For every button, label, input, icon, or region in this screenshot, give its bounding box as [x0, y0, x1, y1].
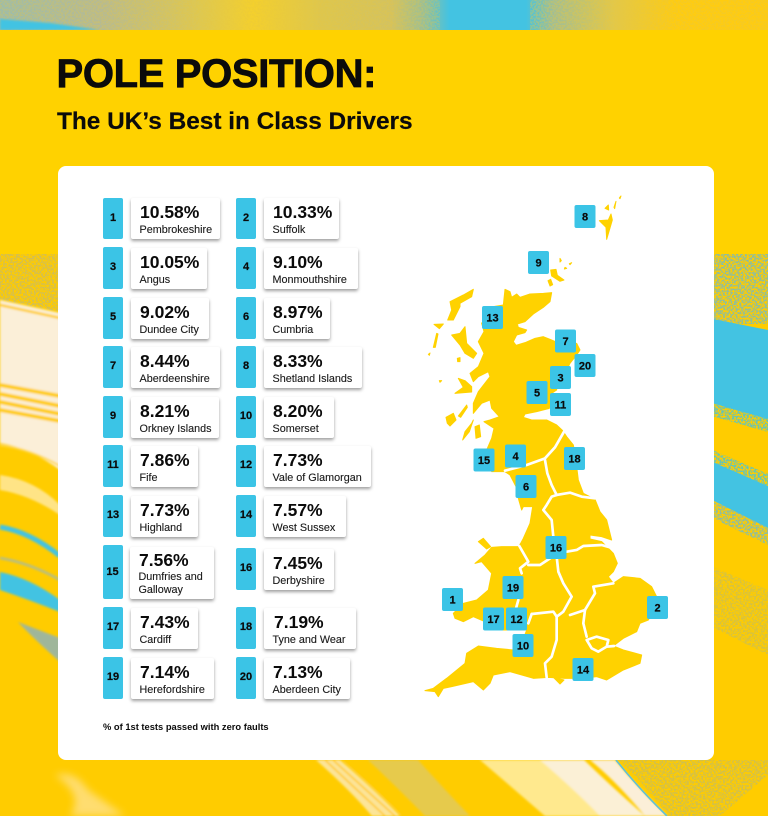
panel: white card: [58, 166, 714, 760]
rank 19: Herefordshire: 7.14%: [140, 662, 190, 682]
rank 7: Aberdeenshire: [103, 346, 222, 392]
rank 8: Shetland Islands: [236, 346, 364, 392]
left texture: [0, 254, 60, 312]
marker 6: [516, 475, 536, 498]
rank 20: Aberdeen City: 7.13%: [273, 662, 323, 682]
marker 2: 2: [654, 602, 661, 614]
rank 16: Derbyshire: 16: [240, 562, 252, 574]
marker 18: [564, 447, 585, 470]
rank 10: Somerset: 8.20%: [273, 400, 323, 420]
rank 14: West Sussex: [236, 495, 348, 541]
rank 13: Highland: 7.73%: [140, 500, 190, 520]
rank 1: Pembrokeshire: 10.58%: [140, 202, 199, 222]
marker 9: 9: [535, 258, 542, 270]
rank 6: Cumbria: [236, 297, 332, 343]
rank 17: Cardiff: 17: [107, 621, 119, 633]
rank 18: Tyne and Wear: 7.19%: [274, 612, 324, 632]
rank 18: Tyne and Wear: 18: [240, 621, 252, 633]
rank 4: Monmouthshire: Monmouthshire: [272, 274, 347, 286]
marker 14: 14: [577, 664, 590, 676]
marker 5: [526, 381, 548, 404]
marker 1: 1: [449, 594, 456, 606]
rank 8: Shetland Islands: 8: [243, 360, 249, 372]
marker 11: [550, 393, 571, 416]
marker 15: 15: [478, 455, 490, 467]
Shetland: [599, 196, 621, 239]
marker 3: [550, 366, 571, 389]
marker 1: [442, 588, 463, 611]
rank 9: Orkney Islands: Orkney Islands: [140, 422, 212, 434]
rank 20: Aberdeen City: [236, 657, 352, 703]
rank 3: Angus: [103, 247, 209, 293]
marker 14: [572, 658, 594, 681]
marker 7: [555, 330, 576, 352]
rank 14: West Sussex: West Sussex: [272, 522, 335, 534]
rank 11: Fife: Fife: [140, 472, 158, 484]
rank 11: Fife: [103, 445, 200, 491]
Orkney: [548, 258, 572, 286]
rank 2: Suffolk: 10.33%: [273, 202, 332, 222]
rank 10: Somerset: Somerset: [272, 422, 319, 434]
rank 1: Pembrokeshire: 1: [110, 212, 116, 224]
rank 19: Herefordshire: 19: [107, 671, 119, 683]
marker 3: 3: [557, 372, 564, 384]
rank 14: West Sussex: 14: [240, 509, 252, 521]
rank 8: Shetland Islands: Shetland Islands: [272, 372, 352, 384]
marker 13: [482, 306, 503, 329]
marker 15: [474, 448, 494, 472]
marker 12: 12: [510, 614, 523, 626]
rank 19: Herefordshire: [103, 657, 216, 703]
marker 8: 8: [582, 212, 588, 224]
rank 1: Pembrokeshire: Pembrokeshire: [140, 224, 212, 236]
rank 15: Dumfries and Galloway: Dumfries and: [138, 571, 203, 583]
rank 13: Highland: 13: [107, 509, 119, 521]
rank 6: Cumbria: 8.97%: [273, 302, 323, 322]
rank 13: Highland: [103, 495, 200, 541]
mainland: [425, 289, 657, 697]
rank 2: Suffolk: 2: [243, 212, 249, 224]
rank 11: Fife: 11: [107, 459, 119, 471]
rank 9: Orkney Islands: [103, 396, 221, 442]
rank 18: Tyne and Wear: Tyne and Wear: [272, 634, 346, 646]
Isle of Wight: [553, 677, 564, 684]
rank 16: Derbyshire: [236, 548, 336, 594]
islands: [448, 289, 473, 320]
marker 17: [483, 608, 504, 630]
rank 8: Shetland Islands: 8.33%: [273, 350, 323, 370]
rank 7: Aberdeenshire: Aberdeenshire: [140, 372, 210, 384]
rank 12: Vale of Glamorgan: 12: [240, 459, 252, 471]
rank 6: Cumbria: 6: [243, 311, 249, 323]
rank 16: Derbyshire: Derbyshire: [272, 574, 325, 586]
rank 18: Tyne and Wear: [236, 607, 358, 653]
rank 10: Somerset: 10: [240, 410, 252, 422]
marker 20: 20: [579, 360, 591, 372]
rank 15: Dumfries and Galloway: [103, 545, 216, 603]
rank 3: Angus: Angus: [140, 274, 170, 286]
title: POLE POSITION:: [56, 52, 376, 96]
subtitle: The UK’s Best in Class Drivers: [57, 108, 413, 135]
marker 4: [505, 444, 526, 468]
rank 4: Monmouthshire: 9.10%: [273, 252, 323, 272]
marker 17: 17: [487, 614, 500, 626]
rank 7: Aberdeenshire: 8.44%: [140, 350, 190, 370]
rank 15: Dumfries and Galloway: 15: [106, 566, 119, 578]
rank 17: Cardiff: [103, 607, 200, 653]
rank 11: Fife: 7.86%: [140, 450, 190, 470]
marker 19: [502, 576, 524, 599]
marker 10: 10: [517, 640, 529, 652]
rank 9: Orkney Islands: 9: [110, 410, 116, 422]
marker 11: 11: [555, 400, 566, 412]
rank 12: Vale of Glamorgan: Vale of Glamorgan: [272, 472, 362, 484]
rank 17: Cardiff: 7.43%: [140, 612, 190, 632]
rank 7: Aberdeenshire: 7: [110, 360, 116, 372]
marker 13: 13: [486, 312, 499, 324]
marker 8: [574, 205, 596, 228]
marker 10: [512, 634, 534, 657]
marker 19: 19: [507, 582, 519, 594]
right texture: [708, 254, 768, 324]
marker 2: [647, 596, 668, 619]
map: county borders: [505, 432, 614, 677]
rank 20: Aberdeen City: 20: [240, 671, 252, 683]
rank 12: Vale of Glamorgan: [236, 445, 373, 491]
marker 7: 7: [562, 336, 569, 348]
rank 15: Dumfries and Galloway: 7.56%: [139, 550, 189, 570]
marker 16: 16: [550, 542, 562, 554]
rank 15: Dumfries and Galloway: Galloway: [138, 584, 183, 596]
rank 4: Monmouthshire: [236, 247, 360, 293]
rank 2: Suffolk: [236, 198, 341, 243]
rank 17: Cardiff: Cardiff: [140, 634, 171, 646]
rank 10: Somerset: [236, 396, 336, 442]
rank 2: Suffolk: Suffolk: [272, 224, 305, 236]
footnote: % of 1st tests passed with zero faults: [103, 722, 269, 732]
rank 12: Vale of Glamorgan: 7.73%: [273, 450, 323, 470]
marker 16: [546, 536, 566, 559]
marker 5: 5: [534, 388, 540, 400]
rank 5: Dundee City: [103, 297, 211, 343]
marker 4: 4: [512, 451, 519, 463]
bottom texture: [55, 774, 125, 816]
Anglesey: [478, 538, 491, 549]
rank 4: Monmouthshire: 4: [243, 261, 249, 273]
marker 9: [528, 251, 549, 274]
rank 19: Herefordshire: Herefordshire: [140, 684, 205, 696]
rank 20: Aberdeen City: Aberdeen City: [272, 684, 341, 696]
rank 1: Pembrokeshire: [103, 198, 222, 243]
rank 5: Dundee City: 5: [110, 311, 116, 323]
marker 18: 18: [568, 454, 581, 466]
rank 5: Dundee City: 9.02%: [140, 302, 190, 322]
marker 6: 6: [523, 482, 529, 494]
rank 5: Dundee City: Dundee City: [140, 324, 199, 336]
marker 12: [506, 608, 527, 630]
rank 3: Angus: 10.05%: [140, 252, 199, 272]
rank 16: Derbyshire: 7.45%: [273, 552, 323, 572]
map: Great Britain landmass: [425, 196, 657, 697]
rank 14: West Sussex: 7.57%: [273, 500, 323, 520]
rank 9: Orkney Islands: 8.21%: [140, 400, 190, 420]
rank 13: Highland: Highland: [140, 522, 182, 534]
marker 20: [574, 354, 596, 377]
rank 6: Cumbria: Cumbria: [272, 324, 313, 336]
rank 3: Angus: 3: [110, 261, 116, 273]
